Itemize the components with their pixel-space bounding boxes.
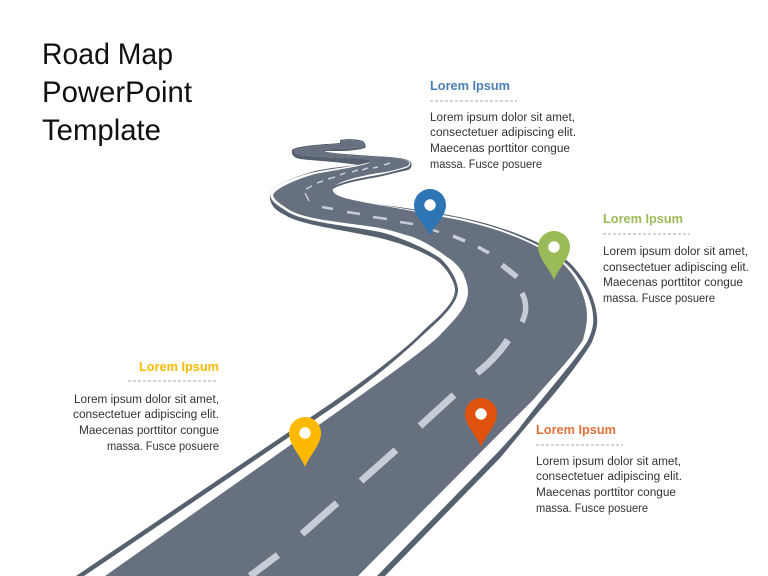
pin: yellow xyxy=(289,417,321,467)
pin: blue xyxy=(414,189,446,236)
title xyxy=(42,38,193,147)
text block: orange: Lorem Ipsum xyxy=(536,422,616,437)
text block: green: Lorem Ipsum xyxy=(603,211,683,226)
road side wall xyxy=(76,139,597,576)
pin: green xyxy=(538,231,570,280)
text block: blue xyxy=(430,78,576,171)
lane dashes xyxy=(250,163,526,576)
text block: yellow: consectetuer adipiscing elit. xyxy=(73,409,219,421)
text block: blue: Lorem Ipsum xyxy=(430,78,510,93)
title: Road Map xyxy=(42,38,173,71)
pin: orange xyxy=(465,398,497,447)
text block: orange: Lorem ipsum dolor sit amet, xyxy=(536,456,681,468)
text block: yellow: Lorem Ipsum xyxy=(139,359,219,374)
text block: yellow: Maecenas porttitor congue xyxy=(79,425,219,437)
text block: orange: consectetuer adipiscing elit. xyxy=(536,471,682,483)
text block: blue: massa. Fusce posuere xyxy=(430,159,542,171)
text block: yellow: Lorem ipsum dolor sit amet, xyxy=(74,394,219,406)
text block: orange: Maecenas porttitor congue xyxy=(536,487,676,499)
text block: green: Lorem ipsum dolor sit amet, xyxy=(603,246,748,258)
title: Template xyxy=(42,114,161,147)
title: PowerPoint xyxy=(42,76,193,109)
text block: yellow xyxy=(73,359,219,453)
text block: green: consectetuer adipiscing elit. xyxy=(603,262,749,274)
winding road xyxy=(76,139,597,576)
text block: blue: Lorem ipsum dolor sit amet, xyxy=(430,112,575,124)
text block: orange: massa. Fusce posuere xyxy=(536,503,648,515)
text block: green xyxy=(603,211,749,305)
text block: yellow: massa. Fusce posuere xyxy=(107,441,219,453)
text block: blue: Maecenas porttitor congue xyxy=(430,143,570,155)
asphalt surface xyxy=(105,141,587,576)
text block: orange xyxy=(536,422,682,515)
white road shoulder xyxy=(84,141,593,576)
text block: blue: consectetuer adipiscing elit. xyxy=(430,127,576,139)
text block: green: Maecenas porttitor congue xyxy=(603,277,743,289)
text block: green: massa. Fusce posuere xyxy=(603,293,715,305)
